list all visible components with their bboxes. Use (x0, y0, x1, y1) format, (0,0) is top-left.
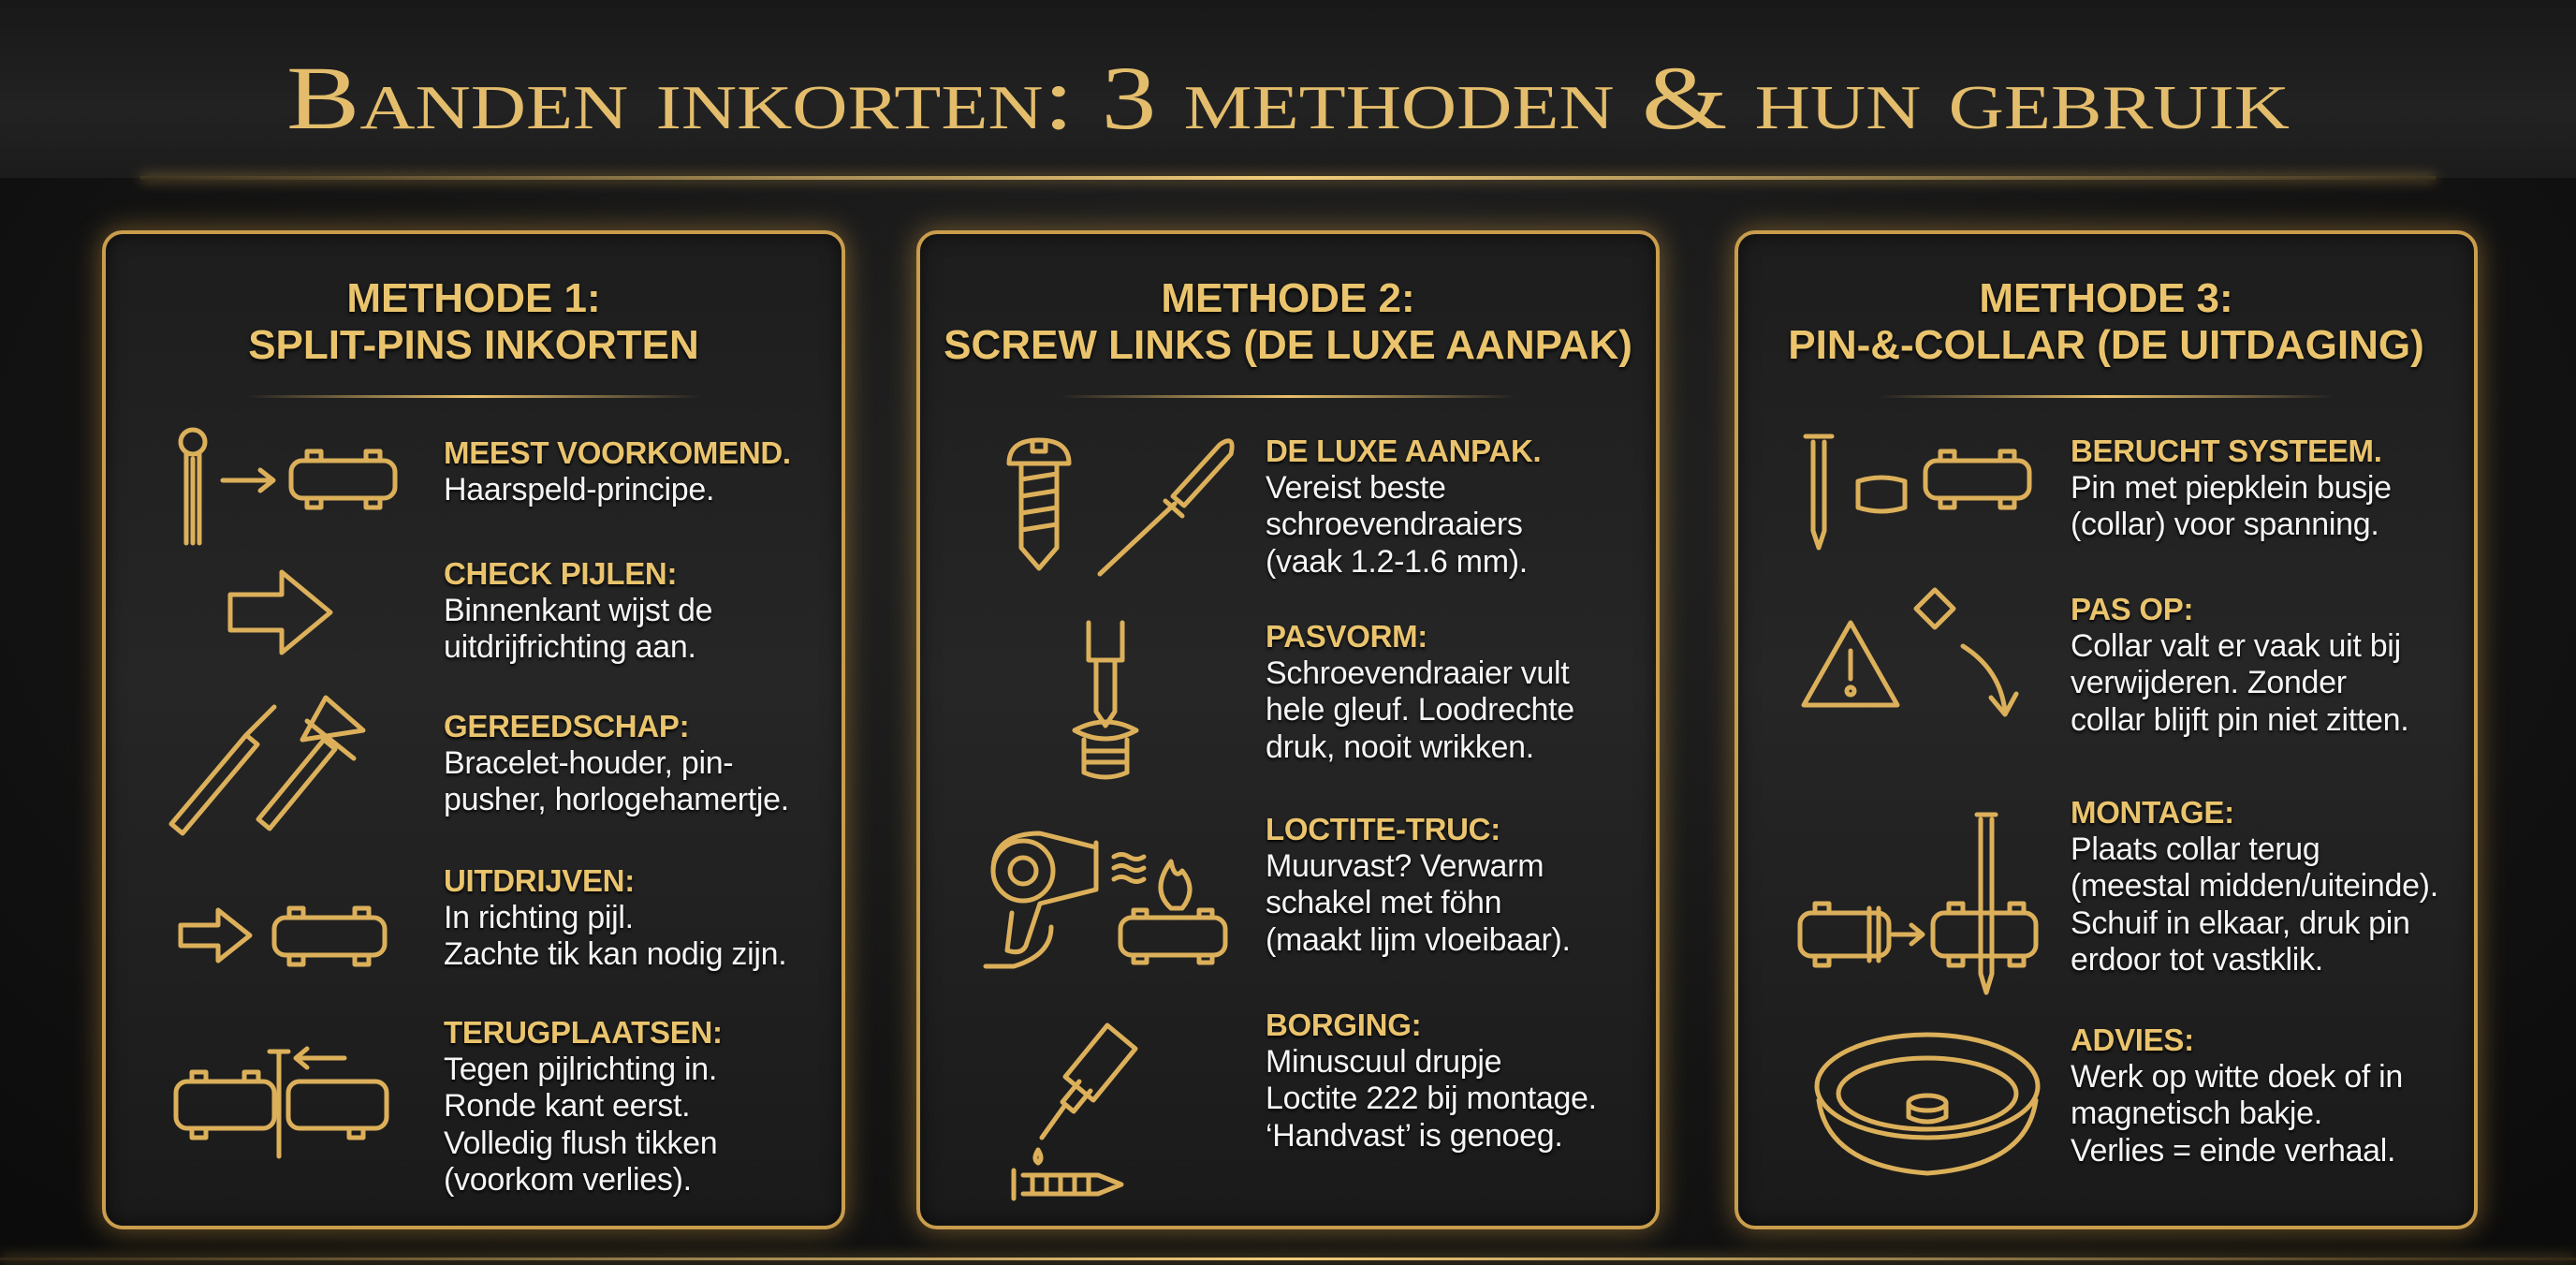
item: meest voorkomend: Haarspeld-principe. (444, 472, 714, 507)
item: uitdrijven: In richting pijl. (444, 899, 634, 934)
title: Banden inkorten: 3 methoden & hun gebruik (286, 48, 2290, 148)
item: montage: erdoor tot vastklik. (2071, 942, 2323, 978)
item: pas op: verwijderen. Zonder (2071, 665, 2347, 700)
item: uitdrijven: Zachte tik kan nodig zijn. (444, 936, 786, 972)
heading: methode 2: SCREW LINKS (DE LUXE AANPAK) (944, 322, 1632, 368)
icon: hairdryer and heated link (986, 833, 1225, 966)
icon: nail, collar, link (1806, 436, 2029, 548)
icon: magnetic bowl (1817, 1035, 2038, 1173)
item: de luxe aanpak: DE LUXE AANPAK. (1266, 434, 1541, 468)
item: terugplaatsen: Volledig flush tikken (444, 1125, 717, 1161)
heading: methode 3 (1788, 275, 2424, 370)
item: loctite-truc: (maakt lijm vloeibaar). (1266, 921, 1571, 957)
item: gereedschap: Bracelet-houder, pin- (444, 745, 733, 781)
item: advies: ADVIES: (2071, 1022, 2194, 1057)
item: pasvorm: PASVORM: (1266, 619, 1427, 654)
heading: methode 3: PIN-&-COLLAR (DE UITDAGING) (1788, 322, 2424, 368)
item: de luxe aanpak: (vaak 1.2-1.6 mm). (1266, 543, 1528, 579)
item: berucht systeem: Pin met piepklein busje (2071, 470, 2392, 506)
item: borging: Loctite 222 bij montage. (1266, 1081, 1597, 1116)
item: pasvorm (1266, 619, 1574, 764)
item: loctite-truc: Muurvast? Verwarm (1266, 848, 1544, 884)
item: meest voorkomend (444, 435, 791, 509)
item: montage: Schuif in elkaar, druk pin (2071, 905, 2410, 940)
item: advies (2071, 1022, 2403, 1169)
heading: methode 2: METHODE 2: (1161, 275, 1415, 321)
item: pasvorm: hele gleuf. Loodrechte (1266, 692, 1574, 728)
heading: methode 3: METHODE 3: (1979, 275, 2233, 321)
item: check pijlen (444, 556, 712, 667)
item: pas op: Collar valt er vaak uit bij (2071, 627, 2401, 663)
item: uitdrijven (444, 863, 786, 974)
item: advies: magnetisch bakje. (2071, 1096, 2322, 1131)
icon: outline arrow (230, 572, 330, 653)
item: loctite-truc: schakel met föhn (1266, 885, 1501, 920)
panel: methode 3 (1734, 230, 2478, 1229)
item: pas op: collar blijft pin niet zitten. (2071, 702, 2408, 738)
item: montage (2071, 795, 2438, 978)
heading: methode 2 (944, 275, 1632, 370)
icon: split pin to link (181, 430, 395, 543)
heading: methode 1: METHODE 1: (346, 275, 601, 321)
item: terugplaatsen: Ronde kant eerst. (444, 1088, 690, 1124)
icon: pin pusher and hammer (171, 698, 363, 833)
item: berucht systeem: BERUCHT SYSTEEM. (2071, 434, 2382, 468)
icon: drive out arrow and link (181, 908, 385, 964)
item: meest voorkomend: MEEST VOORKOMEND. (444, 435, 791, 470)
item: loctite-truc: LOCTITE-TRUC: (1266, 812, 1500, 846)
item: pas op (2071, 592, 2408, 740)
panel: methode 2 (916, 230, 1660, 1229)
item: montage: (meestal midden/uiteinde). (2071, 868, 2438, 904)
item: borging: ‘Handvast’ is genoeg. (1266, 1118, 1563, 1154)
icon: screw and screwdriver (1009, 440, 1232, 574)
icon: warning and falling collar (1804, 590, 2016, 714)
item: uitdrijven: UITDRIJVEN: (444, 863, 635, 898)
item: advies: Verlies = einde verhaal. (2071, 1133, 2395, 1169)
item: pasvorm: Schroevendraaier vult (1266, 655, 1569, 691)
item: de luxe aanpak: schroevendraaiers (1266, 507, 1523, 542)
item: pas op: PAS OP: (2071, 592, 2193, 626)
item: loctite-truc (1266, 812, 1571, 960)
item: advies: Werk op witte doek of in (2071, 1058, 2403, 1094)
item: borging: BORGING: (1266, 1008, 1421, 1042)
item: terugplaatsen (444, 1015, 723, 1199)
item: terugplaatsen: Tegen pijlrichting in. (444, 1051, 717, 1086)
item: de luxe aanpak (1266, 434, 1541, 581)
item: check pijlen: CHECK PIJLEN: (444, 556, 677, 591)
panel: methode 1 (102, 230, 845, 1229)
item: montage: MONTAGE: (2071, 795, 2234, 830)
item: check pijlen: uitdrijfrichting aan. (444, 629, 696, 665)
item: terugplaatsen: TERUGPLAATSEN: (444, 1015, 723, 1050)
icon: reinsert pin (176, 1049, 387, 1156)
item: gereedschap: GEREEDSCHAP: (444, 709, 689, 743)
item: berucht systeem: (collar) voor spanning. (2071, 507, 2378, 542)
item: borging (1266, 1008, 1597, 1155)
item: montage: Plaats collar terug (2071, 831, 2320, 867)
item: de luxe aanpak: Vereist beste (1266, 470, 1446, 506)
item: gereedschap: pusher, horlogehamertje. (444, 782, 789, 817)
item: borging: Minuscuul drupje (1266, 1043, 1501, 1079)
item: berucht systeem (2071, 434, 2392, 544)
item: gereedschap (444, 709, 789, 819)
item: terugplaatsen: (voorkom verlies). (444, 1162, 692, 1198)
heading: methode 1 (248, 275, 699, 368)
item: pasvorm: druk, nooit wrikken. (1266, 728, 1534, 764)
icon: montage (1800, 815, 2036, 993)
icon: screwdriver in slot (1075, 623, 1136, 777)
item: check pijlen: Binnenkant wijst de (444, 592, 712, 627)
icon: glue bottle and screw (1014, 1025, 1135, 1199)
heading: methode 1: SPLIT-PINS INKORTEN (248, 322, 699, 368)
